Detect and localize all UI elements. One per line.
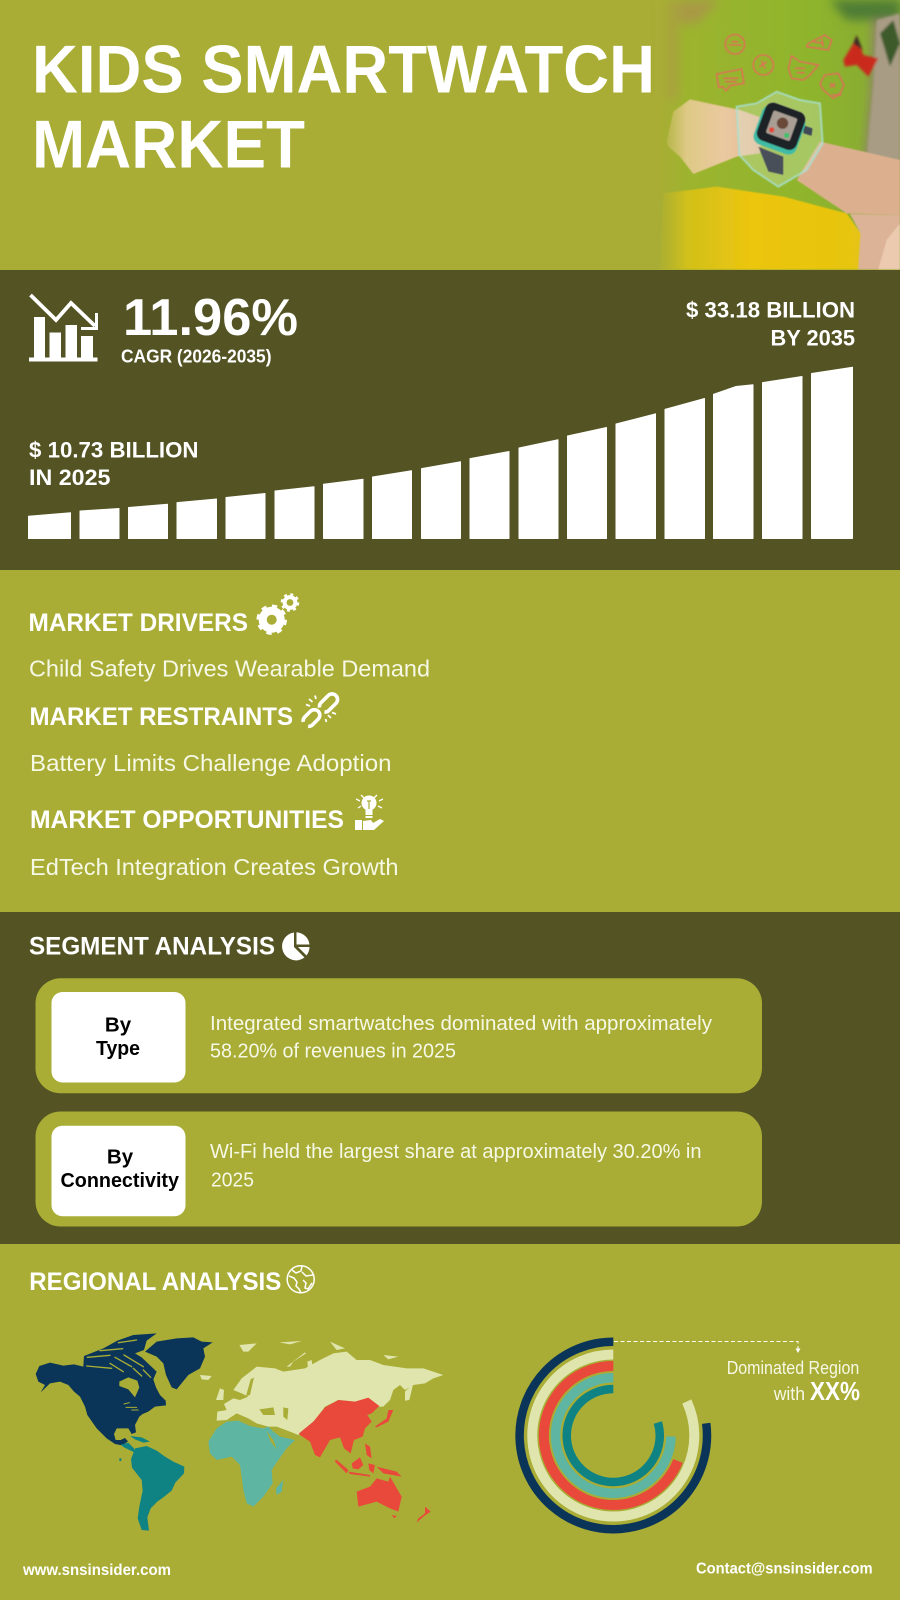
text: connectivity finding xyxy=(210,1141,702,1192)
heading: market opportunities: MARKET OPPORTUNITIES xyxy=(30,806,344,834)
panel: market size and growth xyxy=(0,270,900,570)
label box: by type: Type xyxy=(96,1037,140,1060)
end value: $ 33.18 BILLION xyxy=(686,298,855,323)
callout: dominated region: Dominated Region xyxy=(727,1358,859,1378)
icon: broken chain xyxy=(301,692,340,729)
label box: by connectivity: Connectivity xyxy=(60,1169,180,1192)
text: opportunity: EdTech Integration Creates Growth xyxy=(30,854,398,880)
panel: regional analysis xyxy=(0,1244,900,1600)
CAGR figure: 11.96% xyxy=(123,289,298,347)
world map xyxy=(36,1333,443,1531)
map: Asia Pacific xyxy=(299,1398,431,1523)
label box: by type xyxy=(52,992,186,1082)
map: Africa xyxy=(208,1421,295,1507)
panel: segment analysis xyxy=(0,912,900,1244)
end value: BY 2035 xyxy=(770,325,855,350)
start value: IN 2025 xyxy=(29,465,110,490)
end value xyxy=(686,298,855,350)
title xyxy=(32,32,655,182)
icon: hand holding light bulb xyxy=(355,795,384,830)
panel: market dynamics xyxy=(0,570,900,912)
heading: segment analysis: SEGMENT ANALYSIS xyxy=(29,932,275,960)
text: restraint: Battery Limits Challenge Adoption xyxy=(30,750,392,776)
map: North America xyxy=(36,1333,213,1445)
map: Europe and Russia xyxy=(200,1341,443,1435)
callout: dominated region: with xyxy=(773,1384,805,1404)
text: type finding: Integrated smartwatches dominated with approximately xyxy=(210,1013,712,1035)
bar chart: market growth xyxy=(28,367,852,538)
heading: market restraints: MARKET RESTRAINTS xyxy=(30,703,293,731)
label box: by connectivity xyxy=(52,1126,186,1216)
footer: website: www.snsinsider.com xyxy=(22,1562,171,1579)
title: KIDS SMARTWATCH xyxy=(32,32,655,108)
CAGR label: CAGR (2026-2035) xyxy=(121,346,272,366)
start value: $ 10.73 BILLION xyxy=(29,438,198,462)
text: type finding xyxy=(210,1013,712,1063)
panel: header xyxy=(0,0,900,270)
label box: by connectivity: By xyxy=(107,1145,134,1168)
icon: gears xyxy=(258,594,298,633)
callout: dominated region: XX% xyxy=(810,1376,860,1406)
card: by type xyxy=(36,978,762,1093)
text: type finding: 58.20% of revenues in 2025 xyxy=(210,1041,456,1063)
icon: chart with trend arrow xyxy=(29,295,98,362)
photo: child's wrist wearing a smartwatch xyxy=(657,0,900,269)
map: South America xyxy=(119,1436,184,1531)
text: connectivity finding: 2025 xyxy=(211,1170,254,1192)
title: MARKET xyxy=(32,106,305,182)
icon: pie chart xyxy=(282,932,310,960)
callout: dominated region xyxy=(614,1342,860,1406)
text: driver: Child Safety Drives Wearable Demand xyxy=(29,656,430,682)
text: connectivity finding: Wi-Fi held the largest share at approximately 30.20% in xyxy=(210,1141,702,1163)
icon: globe xyxy=(287,1266,314,1293)
heading: market drivers: MARKET DRIVERS xyxy=(28,609,248,637)
radial bar chart xyxy=(520,1342,707,1529)
heading: regional analysis: REGIONAL ANALYSIS xyxy=(29,1268,281,1296)
label box: by type: By xyxy=(105,1014,132,1037)
footer: contact: Contact@snsinsider.com xyxy=(696,1560,873,1577)
start value xyxy=(29,438,198,490)
card: by connectivity xyxy=(36,1112,762,1226)
